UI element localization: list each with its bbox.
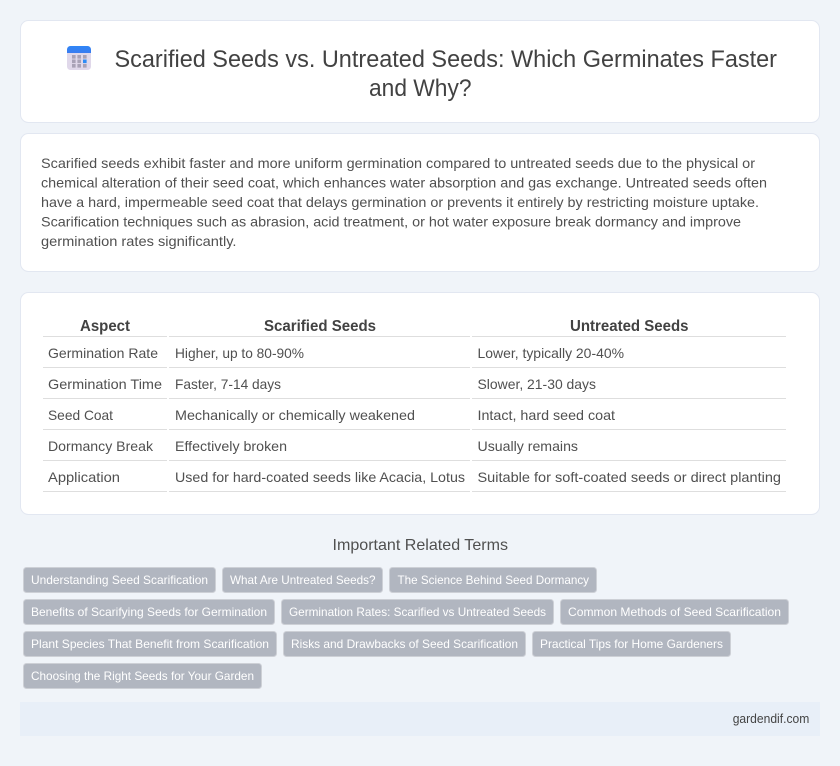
description text: have a hard, impermeable seed coat that delays germination or prevents it entirely by restricting moisture uptake. [41, 194, 759, 210]
row: dormancy break: Usually remains [478, 438, 578, 454]
table header row [43, 318, 786, 336]
table header row: Scarified Seeds [264, 318, 376, 335]
tag: Choosing the Right Seeds for Your Garden [31, 669, 254, 683]
row: germination rate: Lower, typically 20-40% [478, 345, 624, 361]
panel: description [20, 134, 820, 272]
tag [390, 568, 596, 592]
tag: The Science Behind Seed Dormancy [398, 573, 589, 587]
title: Scarified Seeds vs. Untreated Seeds: Which Germinates Faster [114, 46, 777, 73]
row: application [43, 469, 786, 492]
row: application: Application [48, 469, 120, 485]
row: germination rate: Germination Rate [48, 345, 158, 361]
row: germination time: Faster, 7-14 days [175, 376, 281, 392]
description text: chemical alteration of their seed coat, which enhances water absorption and gas exchange. Untreated seeds often [41, 174, 767, 190]
row: seed coat: Seed Coat [48, 407, 113, 423]
table header row: Aspect [80, 318, 131, 335]
tag [24, 664, 262, 688]
row: application: Suitable for soft-coated seeds or direct planting [478, 469, 781, 485]
tag [24, 600, 274, 624]
row: germination time [43, 376, 786, 398]
tag: Risks and Drawbacks of Seed Scarification [291, 637, 518, 651]
heading: important related terms: Important Related Terms [332, 537, 508, 554]
row: germination time: Germination Time [48, 376, 162, 392]
related term tags [24, 568, 788, 688]
description text: Scarified seeds exhibit faster and more uniform germination compared to untreated seeds due to the physical or [41, 155, 755, 171]
panel: comparison table [20, 292, 820, 514]
tag [24, 632, 276, 656]
row: germination rate: Higher, up to 80-90% [175, 345, 304, 361]
tag: Understanding Seed Scarification [31, 573, 208, 587]
tag: Plant Species That Benefit from Scarification [31, 637, 269, 651]
description text: Scarification techniques such as abrasion, acid treatment, or hot water exposure break dormancy and improve [41, 214, 741, 230]
tag [24, 568, 216, 592]
tag [222, 568, 382, 592]
table header row: Untreated Seeds [570, 318, 689, 335]
title: and Why? [369, 75, 472, 102]
panel: title header [20, 20, 820, 122]
row: seed coat [43, 407, 786, 430]
tag: Practical Tips for Home Gardeners [540, 637, 723, 651]
row: application: Used for hard-coated seeds like Acacia, Lotus [175, 469, 465, 485]
row: germination rate [43, 345, 786, 368]
tag [532, 632, 730, 656]
row: seed coat: Mechanically or chemically weakened [175, 407, 415, 423]
description text: germination rates significantly. [41, 233, 236, 249]
row: seed coat: Intact, hard seed coat [478, 407, 615, 423]
row: dormancy break [43, 438, 786, 460]
tag: What Are Untreated Seeds? [230, 573, 376, 587]
tag [560, 600, 788, 624]
tag [282, 600, 554, 624]
icon: calendar [67, 46, 91, 70]
tag: Germination Rates: Scarified vs Untreated Seeds [289, 605, 546, 619]
tag: Benefits of Scarifying Seeds for Germination [31, 605, 267, 619]
title [114, 46, 777, 102]
footer [20, 702, 820, 736]
row: dormancy break: Dormancy Break [48, 438, 154, 454]
footer site name: gardendif.com [733, 712, 809, 726]
row: germination time: Slower, 21-30 days [478, 376, 596, 392]
tag: Common Methods of Seed Scarification [568, 605, 781, 619]
description text [41, 155, 767, 249]
row: dormancy break: Effectively broken [175, 438, 287, 454]
tag [284, 632, 526, 656]
